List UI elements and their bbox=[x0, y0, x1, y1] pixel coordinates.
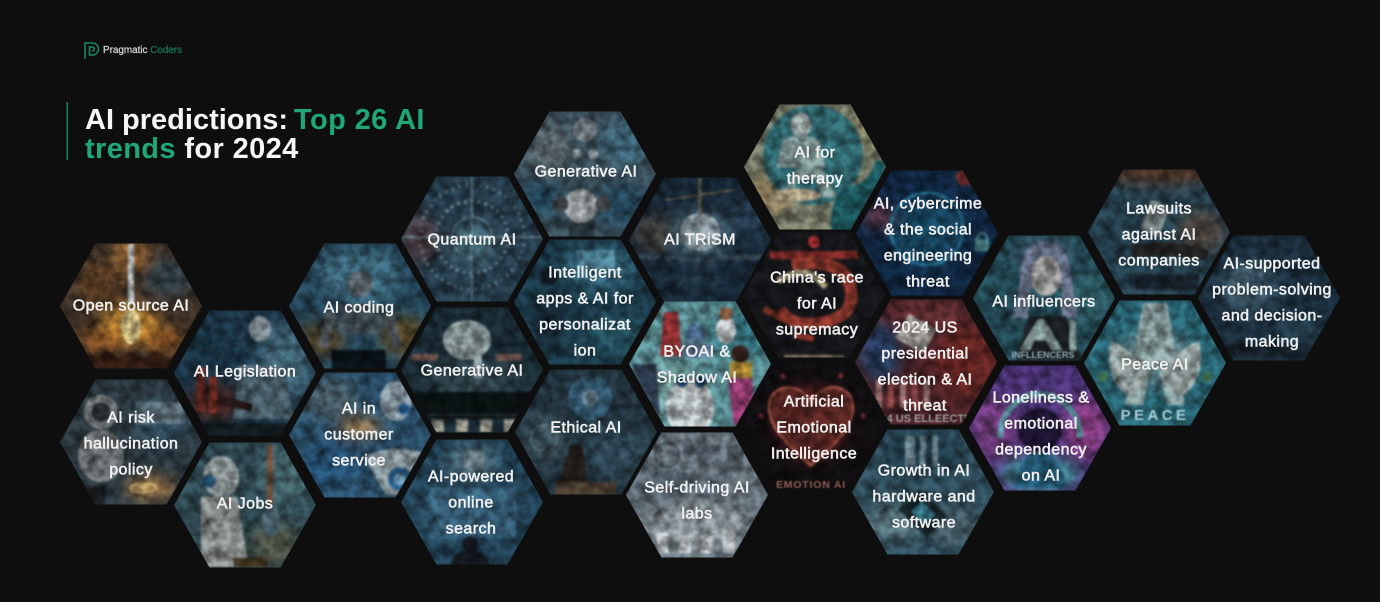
hexagon: Quantum AI bbox=[400, 175, 544, 303]
hexagon: AI Jobs bbox=[173, 441, 317, 569]
hexagon: 2024 US presidential election & AI threat: 2024 US bbox=[892, 320, 958, 336]
hexagon: AI-powered online search: AI-powered bbox=[428, 468, 514, 486]
hexagon: Growth in AI hardware and software: hardware and bbox=[872, 488, 976, 506]
hexagon: Lawsuits against AI companies bbox=[1087, 162, 1231, 296]
hexagon: China's race for AI supremacy bbox=[742, 231, 886, 359]
hexagon: Open source AI: Open source AI bbox=[73, 298, 189, 314]
hexagon: AI risk hallucination policy: hallucination bbox=[84, 436, 178, 452]
hexagon: AI-powered online search: online bbox=[448, 494, 494, 512]
hexagon: AI for therapy: AI for bbox=[795, 144, 836, 162]
hexagon: Loneliness & emotional dependency on AI: Loneliness & bbox=[992, 390, 1090, 406]
hexagon: Self-driving AI labs: Self-driving AI bbox=[644, 480, 750, 496]
hexagon: Self-driving AI labs bbox=[625, 431, 769, 559]
hexagon: AI influencers: AI influencers bbox=[992, 294, 1096, 310]
hexagon: BYOAI & Shadow AI: Shadow AI bbox=[657, 370, 737, 386]
hexagon: Artificial Emotional Intelligence: Emotional bbox=[776, 420, 852, 436]
hexagon: AI risk hallucination policy: policy bbox=[109, 462, 153, 478]
logo: Pragmatic Coders bbox=[85, 43, 182, 59]
hexagon: AI-supported problem-solving and decision-making bbox=[1197, 234, 1341, 362]
hexagon: China's race for AI supremacy: supremacy bbox=[776, 322, 858, 338]
hexagon: Peace AI bbox=[1083, 299, 1227, 427]
hexagon: AI-supported problem-solving and decision-making: problem-solving bbox=[1212, 282, 1332, 298]
hexagon: Artificial Emotional Intelligence: Intelligence bbox=[771, 446, 857, 462]
hexagon: Loneliness & emotional dependency on AI: dependency bbox=[995, 442, 1087, 458]
hexagon: Generative AI (robot): Generative AI bbox=[535, 164, 637, 180]
hexagon: AI, cybercrime & the social engineering threat: threat bbox=[906, 274, 950, 290]
hexagon: Generative AI (brain) bbox=[400, 306, 544, 434]
hexagon: 2024 US presidential election & AI threat: threat bbox=[903, 398, 947, 414]
hexagon: Open source AI bbox=[59, 238, 203, 370]
hexagon: AI-powered online search bbox=[400, 438, 544, 566]
hexagon: Growth in AI hardware and software: Growth in AI bbox=[878, 462, 970, 480]
hexagon: AI influencers bbox=[972, 234, 1116, 362]
hexagon: Intelligent apps & AI for personalization: apps & AI for bbox=[536, 290, 634, 308]
hexagon: AI-supported problem-solving and decision-making: and decision- bbox=[1221, 308, 1323, 324]
hexagon: Intelligent apps & AI for personalization bbox=[513, 238, 657, 366]
hexagon: BYOAI & Shadow AI: BYOAI & bbox=[663, 344, 731, 360]
hexagon: AI Jobs: AI Jobs bbox=[217, 496, 273, 512]
hexagon: Growth in AI hardware and software: software bbox=[892, 514, 956, 532]
hexagon: 2024 US presidential election & AI threat: 2024 US ELLEECTION bbox=[868, 413, 984, 425]
hexagon: Intelligent apps & AI for personalization: ion bbox=[574, 342, 596, 360]
hexagon: AI, cybercrime & the social engineering threat: & the social bbox=[884, 222, 972, 238]
hexagon: Growth in AI hardware and software bbox=[851, 428, 995, 556]
hexagon: AI-powered online search: search bbox=[446, 520, 496, 538]
hexagon: Artificial Emotional Intelligence: EMOTION AI bbox=[776, 479, 846, 491]
hexagon: AI in customer service bbox=[288, 371, 432, 499]
hexagon: AI in customer service: customer bbox=[324, 426, 394, 444]
hexagon: AI risk hallucination policy bbox=[59, 378, 203, 506]
logo: Pragmatic Coders: Pragmatic Coders bbox=[103, 45, 182, 56]
hexagon: Artificial Emotional Intelligence bbox=[758, 372, 867, 488]
hexagon: AI Legislation bbox=[173, 309, 317, 437]
hexagon: Loneliness & emotional dependency on AI: emotional bbox=[1004, 416, 1078, 432]
hexagon: AI coding bbox=[288, 242, 432, 372]
hexagon: AI in customer service: service bbox=[332, 452, 386, 470]
hexagon: Intelligent apps & AI for personalization: personalizat bbox=[539, 316, 631, 334]
hexagon: AI, cybercrime & the social engineering threat: engineering bbox=[884, 248, 972, 264]
hexagon: 2024 US presidential election & AI threat: election & AI bbox=[878, 372, 972, 388]
title: Top 26 AI bbox=[294, 104, 425, 136]
hexagon: Generative AI (brain): Generative AI bbox=[421, 362, 523, 380]
hexagon: Ethical AI bbox=[514, 368, 658, 496]
hexagon: Self-driving AI labs: labs bbox=[681, 506, 713, 522]
hexagon: AI-supported problem-solving and decision-making: making bbox=[1245, 334, 1299, 350]
hexagon: Ethical AI: Ethical AI bbox=[550, 420, 622, 436]
hexagon: Lawsuits against AI companies: Lawsuits bbox=[1126, 200, 1192, 218]
hexagon: China's race for AI supremacy: for AI bbox=[797, 296, 837, 312]
hexagon: AI, cybercrime & the social engineering threat bbox=[855, 168, 999, 297]
hexagon: China's race for AI supremacy: China's race bbox=[770, 270, 864, 286]
hexagon: Quantum AI: Quantum AI bbox=[428, 232, 516, 248]
hexagon: Lawsuits against AI companies: against AI bbox=[1122, 226, 1196, 244]
hexagon: Peace AI: PEACE bbox=[1121, 407, 1189, 424]
hexagon: AI, cybercrime & the social engineering threat: AI, cybercrime bbox=[874, 196, 982, 212]
title: AI predictions: bbox=[85, 104, 288, 136]
hexagon: AI in customer service: AI in bbox=[342, 400, 376, 418]
hexagon: AI TRiSM: AI TRiSM bbox=[664, 232, 736, 248]
hexagon: Loneliness & emotional dependency on AI bbox=[968, 364, 1112, 492]
hexagon: AI coding: AI coding bbox=[324, 300, 394, 316]
hexagon: AI risk hallucination policy: AI risk bbox=[107, 410, 155, 426]
hexagon: AI TRiSM bbox=[628, 176, 772, 304]
hexagon: 2024 US presidential election & AI threat: presidential bbox=[881, 346, 969, 362]
hexagon: Lawsuits against AI companies: companies bbox=[1118, 252, 1200, 270]
title accent bar bbox=[66, 102, 68, 160]
hexagon: 2024 US presidential election & AI threat bbox=[854, 298, 998, 426]
hexagon: Generative AI (robot) bbox=[513, 110, 657, 238]
hexagon: AI for therapy bbox=[741, 103, 887, 231]
hexagon: AI influencers: INFLLENCERS bbox=[1012, 350, 1074, 360]
hexagon: AI Legislation: AI Legislation bbox=[194, 364, 296, 380]
hexagon: BYOAI & Shadow AI bbox=[629, 302, 771, 426]
title: trends for 2024 bbox=[85, 133, 299, 165]
hexagon: AI-supported problem-solving and decision-making: AI-supported bbox=[1223, 256, 1321, 272]
hexagon: Peace AI: Peace AI bbox=[1121, 356, 1189, 374]
hexagon: Artificial Emotional Intelligence: Artificial bbox=[784, 394, 844, 410]
hexagon: Loneliness & emotional dependency on AI: on AI bbox=[1022, 468, 1060, 484]
hexagon: Intelligent apps & AI for personalization: Intelligent bbox=[548, 264, 622, 282]
title bbox=[85, 104, 425, 165]
hexagon: AI for therapy: therapy bbox=[787, 170, 843, 188]
